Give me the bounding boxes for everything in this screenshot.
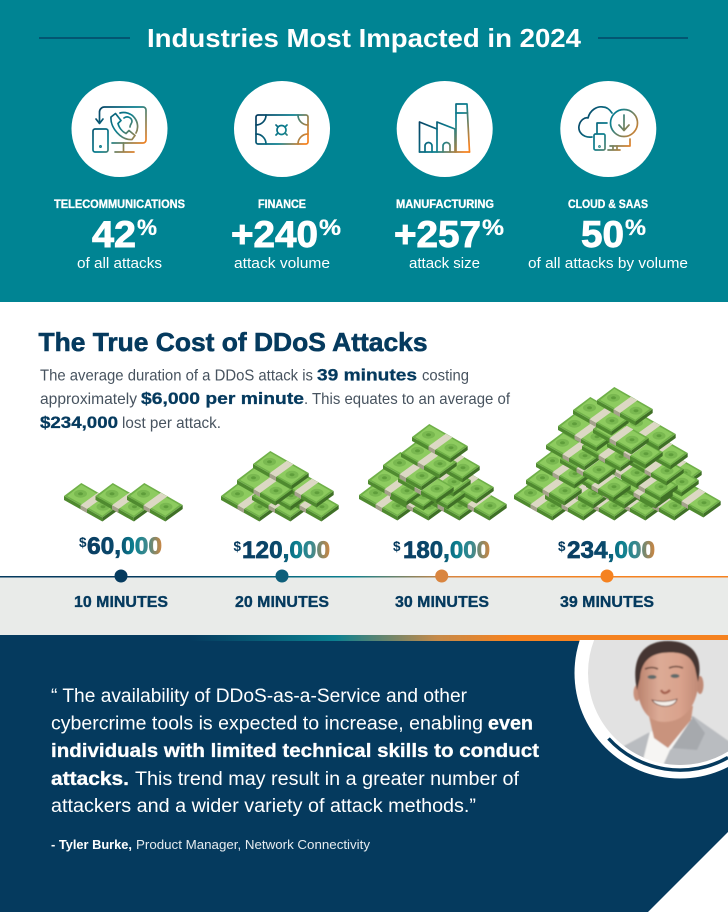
stat: manufacturing: +257 [394,214,481,255]
stat: cloud and saas: CLOUD & SAAS [568,199,648,211]
stat: manufacturing: % [482,215,504,240]
quote text: “ The availability of DDoS-as-a-Service and other [51,686,468,707]
stat: manufacturing: MANUFACTURING [396,199,494,211]
quote text: even [488,714,533,734]
panel: timeline: 30 MINUTES [395,594,489,611]
illustration: money pile 30 minutes [359,424,507,520]
quote text: attacks. [51,769,129,790]
text block: cost summary: lost per attack. [122,415,221,432]
value: $120,000: 120,000 [242,537,330,564]
stat: finance [231,81,341,272]
stat: manufacturing: attack size [409,255,480,272]
text block: cost summary: The average duration of a DDoS attack is [40,368,313,384]
attribution: Product Manager, Network Connectivity [136,837,371,852]
text block: cost summary [40,366,511,432]
stat: telecommunications: of all attacks [77,255,162,272]
quote text: individuals with limited technical skills to conduct [51,741,540,762]
icon: cloud download [579,107,638,150]
value: $234,000: 234,000 [567,537,655,564]
panel: timeline [0,570,728,635]
text block: cost summary: . This equates to an average of [304,391,511,408]
stat: cloud and saas [528,81,688,272]
stat: telecommunications [54,81,185,272]
stat: finance: attack volume [234,255,330,272]
panel: true cost of ddos attacks [0,302,728,576]
panel: timeline: 39 MINUTES [560,594,654,611]
stat: manufacturing [394,81,504,272]
value: $60,000: 60,000 [87,533,162,560]
stat: telecommunications: TELECOMMUNICATIONS [54,199,185,211]
icon: banknote [256,115,308,144]
value: $120,000: $ [234,538,241,554]
panel: timeline: 10 MINUTES [74,594,168,611]
quote text: This trend may result in a greater number of [135,769,520,790]
heading: The True Cost of DDoS Attacks [38,327,428,357]
text block: cost summary: $234,000 [40,413,118,432]
quote text: attackers and a wider variety of attack methods.” [51,796,476,817]
quote text: cybercrime tools is expected to increase, enabling [51,714,483,734]
stat: finance: FINANCE [258,199,306,211]
stat: cloud and saas: % [625,215,646,240]
stat: finance: % [319,215,341,240]
value: $234,000: $ [558,538,566,554]
title: Industries Most Impacted in 2024 [147,23,582,53]
icon: devices with phone call [93,107,146,152]
stat: cloud and saas: of all attacks by volume [528,255,688,272]
illustration: money pile 39 minutes [514,387,721,520]
panel: timeline: 20 MINUTES [235,594,329,611]
text block: cost summary: $6,000 per minute [141,389,304,408]
panel: quote [0,635,728,912]
illustration: money pile 20 minutes [221,451,339,522]
value: $180,000: $ [393,538,401,554]
text block: cost summary: 39 minutes [317,366,417,384]
portrait: tyler burke [574,640,728,778]
panel: industries most impacted [0,0,728,302]
stat: telecommunications: 42 [92,214,136,255]
stat: finance: +240 [231,214,318,255]
icon: factory [420,104,470,152]
attribution: - Tyler Burke, [51,837,132,852]
quote text [51,686,540,817]
value: $180,000: 180,000 [403,537,490,564]
stat: cloud and saas: 50 [581,214,624,255]
illustration: money pile 10 minutes [64,483,183,522]
text block: cost summary: costing [422,368,469,384]
value: $60,000: $ [79,534,87,550]
text block: cost summary: approximately [40,391,137,408]
stat: telecommunications: % [137,215,157,240]
